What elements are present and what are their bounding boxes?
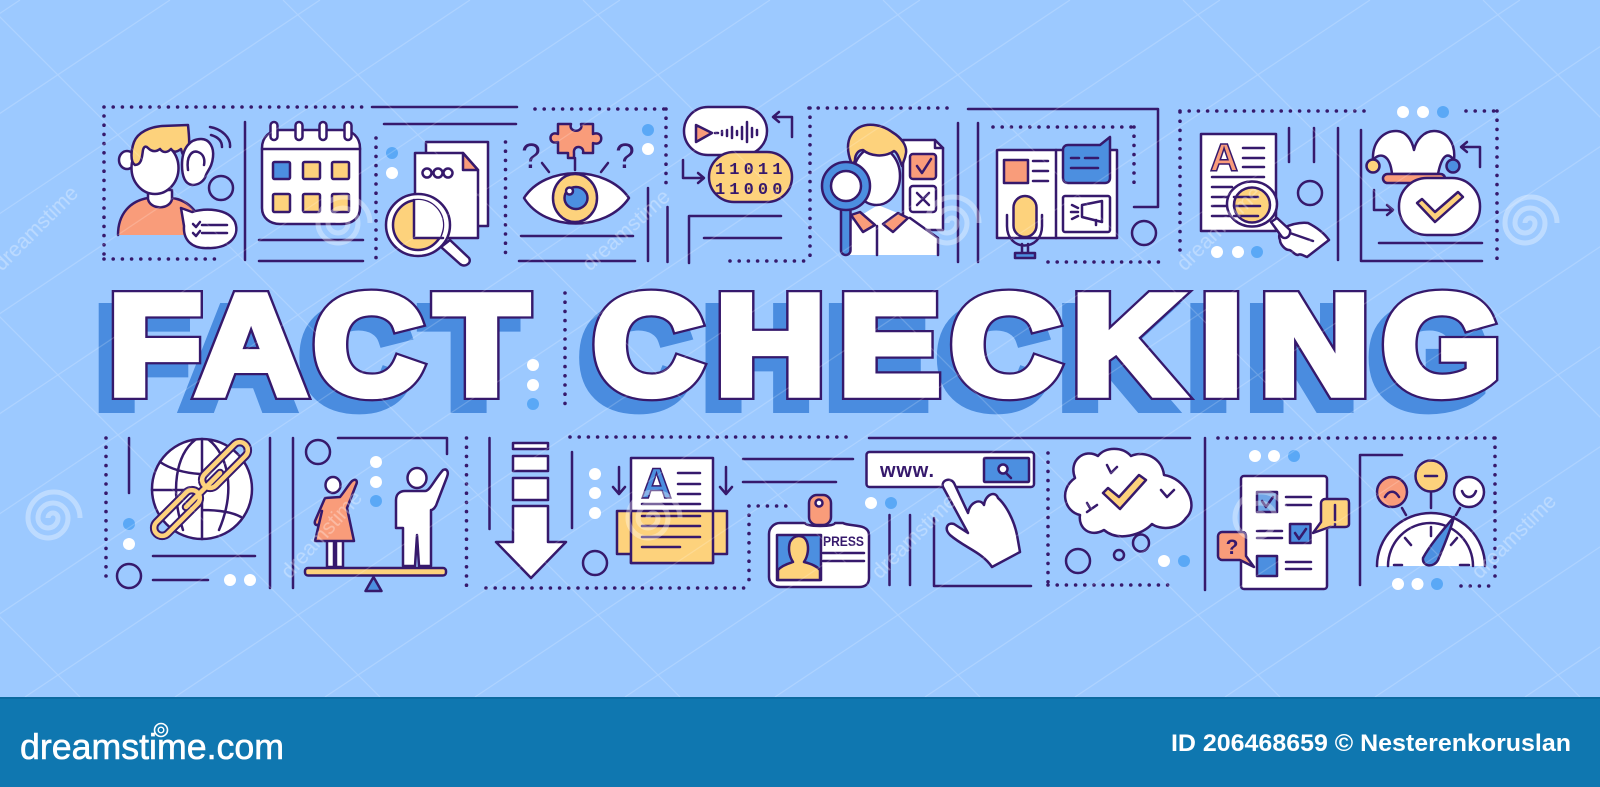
frame lines and dotted borders, top row — [104, 106, 1498, 263]
title outlined letters: FACT CHECKING — [109, 267, 1501, 424]
footer credit: ID 206468659 © Nesterenkoruslan — [1171, 730, 1571, 757]
icon: article in printer: A — [641, 460, 672, 508]
icon: audio bubble and binary code: 11011 — [715, 161, 787, 180]
title outlined letters: FACT CHECKING — [109, 267, 1501, 424]
watermark text: dreamstime — [867, 490, 961, 584]
icon: article under magnifier with hand — [1201, 134, 1329, 257]
icon: address bar with hand pointer: www. — [879, 460, 934, 482]
footer bar — [0, 697, 1600, 787]
icon: address bar with hand pointer — [866, 452, 1034, 567]
icon: press badge: PRESS — [823, 534, 864, 549]
watermark text: dreamstime — [578, 185, 675, 276]
icon: person listening — [118, 125, 236, 248]
frame lines and dotted borders, bottom row — [106, 437, 1496, 590]
icon: calendar — [262, 122, 360, 224]
title separator dots — [527, 293, 565, 410]
icon: checklist with speech bubbles: ? — [1226, 536, 1238, 559]
title: FACT CHECKING — [96, 267, 1501, 437]
icon: eye with puzzle piece: ? — [521, 137, 541, 176]
icon: article under magnifier with hand: A — [1210, 137, 1238, 180]
footer logo: dreamstime.com: dreamstime.com — [20, 726, 284, 767]
icon: mood gauge — [1377, 460, 1485, 566]
icon: man with magnifier and checklist — [822, 125, 943, 255]
icon: documents under magnifier — [386, 142, 488, 265]
title shadow: FACT CHECKING — [96, 280, 1488, 437]
icon: press badge — [769, 495, 869, 587]
icon: jester hat and check — [1366, 131, 1480, 235]
watermark text — [0, 182, 1561, 584]
icon: eye with puzzle piece — [521, 124, 635, 224]
icon: audio bubble and binary code — [683, 107, 792, 202]
icon: magazine and microphone — [997, 137, 1117, 258]
icon: down arrow — [496, 443, 566, 578]
chain links — [151, 439, 251, 539]
icon: brain cloud with check — [1065, 449, 1191, 560]
watermark text: dreamstime — [1467, 490, 1561, 584]
watermark text: dreamstime — [1172, 182, 1266, 276]
icon: globe with chain link — [151, 439, 252, 539]
icon: checklist with speech bubbles — [1218, 476, 1349, 589]
icon: woman and man on balance scale — [305, 468, 448, 591]
icon: audio bubble and binary code: 11000 — [715, 181, 787, 200]
icon: article in printer — [613, 458, 732, 563]
icon: eye with puzzle piece: ? — [615, 137, 635, 176]
watermark spirals — [28, 197, 1557, 538]
watermark text: dreamstime — [277, 486, 367, 583]
